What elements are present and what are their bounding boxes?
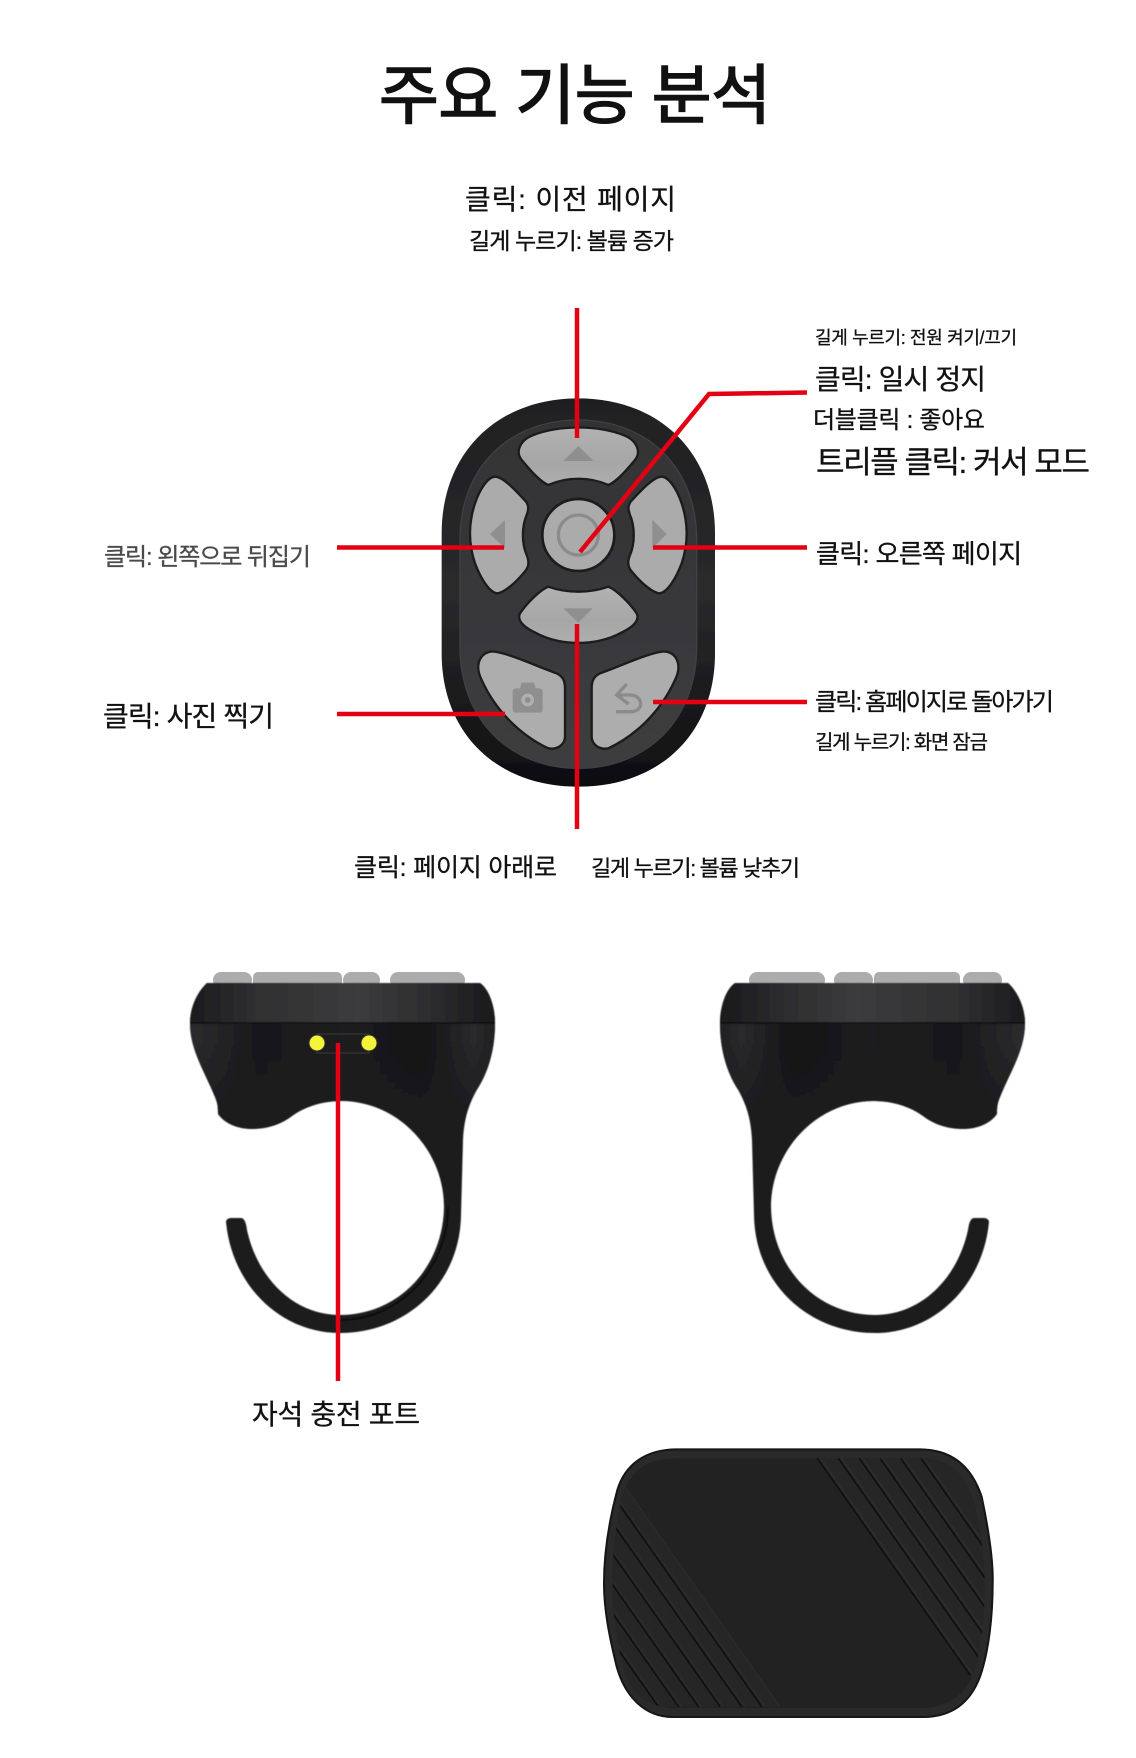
label: centre button (813, 328, 1090, 480)
button: up (519, 427, 638, 485)
arrow: to left button (337, 545, 504, 550)
arrow: to charging port (336, 1043, 340, 1381)
grip stripes: bottom left (612, 1488, 780, 1707)
ring body (720, 983, 1025, 1333)
button: centre (542, 499, 614, 571)
button: camera (478, 652, 565, 749)
label: up click: 클릭: 이전 페이지 (465, 184, 676, 215)
charging pin left (309, 1035, 325, 1051)
pad top surface (612, 1458, 984, 1708)
button: right (628, 477, 687, 593)
label: up long press: 길게 누르기: 볼륨 증가 (469, 228, 674, 254)
label: right button: 클릭: 오른쪽 페이지 (816, 539, 1022, 569)
ring buttons (749, 972, 1002, 988)
magnetic base pad (603, 1448, 994, 1718)
label: charging port: 자석 충전 포트 (252, 1399, 420, 1430)
arrow: to right button (653, 545, 807, 550)
arrow: to camera button (337, 712, 505, 716)
button: down (519, 587, 638, 643)
icon: up triangle (563, 446, 593, 461)
label: down long press: 길게 누르기: 볼륨 낮추기 (591, 856, 800, 881)
arrow: to up button (575, 308, 579, 438)
label: home long press: 길게 누르기: 화면 잠금 (815, 731, 988, 754)
label: left button: 클릭: 왼쪽으로 뒤집기 (104, 544, 311, 571)
pad body (604, 1449, 993, 1717)
ring buttons (213, 972, 465, 988)
ring front view with charging port (190, 972, 495, 1333)
remote control top view (442, 398, 715, 787)
label: centre triple click: 트리플 클릭: 커서 모드 (816, 445, 1090, 480)
label: home button (815, 689, 1054, 754)
label: up button (465, 184, 676, 254)
icon: back arrow (616, 684, 641, 712)
label: centre click: 클릭: 일시 정지 (815, 364, 986, 395)
charging pin right (361, 1035, 377, 1051)
button: left (470, 477, 528, 593)
icon: right triangle (652, 520, 667, 548)
label: home click: 클릭: 홈페이지로 돌아가기 (815, 689, 1054, 716)
charging port outline (317, 1034, 369, 1053)
icon: camera (513, 683, 543, 713)
button: back (592, 652, 678, 749)
icon: centre ring (558, 515, 598, 555)
label: centre long press: 길게 누르기: 전원 켜기/끄기 (815, 328, 1017, 348)
arrow: to down button (575, 624, 579, 829)
remote inner panel (460, 420, 697, 768)
title: 주요 기능 분석 (379, 59, 771, 132)
grip stripes: top right (817, 1458, 984, 1675)
ring body (190, 983, 495, 1333)
arrow: to centre button (580, 392, 807, 552)
arrow: to back button (653, 700, 807, 704)
remote outer shell (442, 398, 715, 787)
icon: left triangle (490, 520, 505, 548)
ring back view (720, 972, 1025, 1333)
label: camera button: 클릭: 사진 찍기 (103, 701, 274, 732)
icon: down triangle (563, 608, 593, 623)
label: centre double click: 더블클릭 : 좋아요 (813, 407, 985, 434)
label: down click: 클릭: 페이지 아래로 (354, 854, 557, 882)
